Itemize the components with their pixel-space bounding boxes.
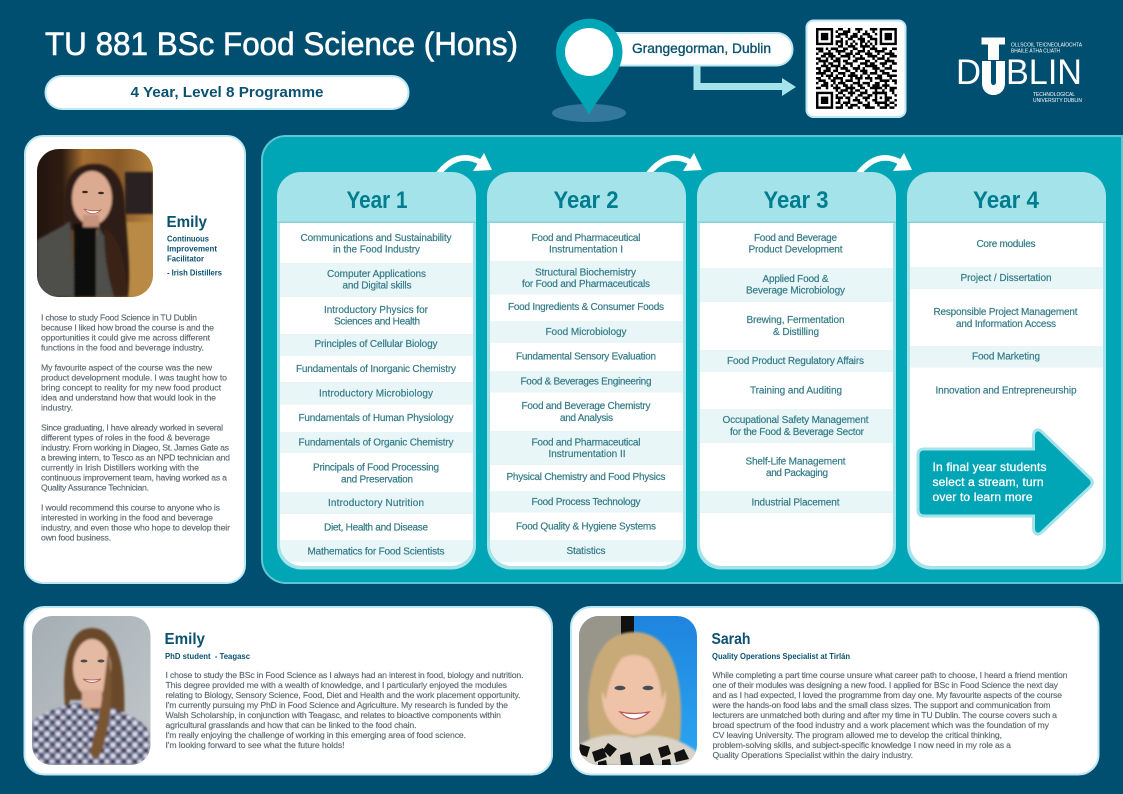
Year 2 modules: Fundamental Sensory Evaluation [516, 352, 656, 362]
Year 1 modules: and Digital skills [342, 280, 412, 292]
photo: Emily [32, 616, 150, 765]
Year 3 modules: Product Development [748, 244, 843, 256]
Year 1 modules: Fundamentals of Organic Chemistry [298, 438, 454, 448]
Year 3 modules: Applied Food & [762, 274, 829, 285]
testimonial text: industry. [41, 403, 73, 413]
testimonial text: currently in Irish Distillers working with the [41, 463, 199, 473]
testimonial text: functions in the food and beverage industry. [41, 343, 204, 353]
TU Dublin logo: BLIN [1006, 53, 1082, 92]
role: Continuous Improvement Facilitator, Irish Distillers: Improvement [167, 244, 217, 254]
testimonial text: a brewing intern, to Tesco as an NPD technician and [41, 453, 230, 463]
role: Continuous Improvement Facilitator, Irish Distillers: Continuous [167, 234, 210, 244]
testimonial text: interested in working in the food and beverage [41, 513, 213, 523]
Year 2 modules: Physical Chemistry and Food Physics [506, 472, 666, 483]
testimonial text: Walsh Scholarship, in conjunction with Teagasc, and relates to bioactive components within [166, 710, 501, 720]
testimonial text: problem-solving skills, and subject-specific knowledge I now need in my role as a [712, 740, 1011, 750]
Year 1 modules: Fundamentals of Human Physiology [298, 413, 454, 424]
Year 2 modules: Food Quality & Hygiene Systems [516, 522, 656, 532]
testimonial text: lecturers are unmatched both during and after my time in TU Dublin. The course covers such a [712, 710, 1057, 720]
Year 1 modules: Introductory Physics for [324, 305, 429, 316]
photo: Emily [37, 149, 153, 297]
testimonial text: My favourite aspect of the course was the new [41, 363, 213, 373]
panel: graduate testimonial Sarah, Tirlán [571, 607, 1098, 774]
Year 2 modules: and Analysis [560, 413, 613, 424]
callout arrow: final year stream: over to learn more [932, 490, 1033, 504]
TU Dublin logo: UNIVERSITY DUBLIN [1033, 98, 1082, 104]
Year 4 modules: Responsible Project Management [934, 307, 1078, 318]
testimonial text: different types of roles in the food & beverage [41, 433, 210, 443]
testimonial text: Since graduating, I have already worked in several [41, 423, 223, 433]
QR code [806, 20, 906, 117]
Year 1 modules: in the Food Industry [333, 244, 420, 256]
heading: Year 3: Year 3 [764, 187, 828, 214]
testimonial text: relating to Biology, Sensory Science, Food, Diet and Health and the work placement opportunity. [166, 690, 520, 700]
testimonial text: because I liked how broad the course is and the [41, 323, 214, 333]
Year 4 modules: Innovation and Entrepreneurship [936, 386, 1077, 396]
testimonial text: opportunities it could give me across different [41, 333, 211, 343]
programme level pill [46, 76, 408, 109]
TU Dublin logo: BHAILE ÁTHA CLIATH [1011, 48, 1060, 54]
Year 3 modules: & Distilling [773, 327, 819, 338]
testimonial text: bring concept to reality for my new food product [41, 383, 222, 393]
Year 1 modules: Computer Applications [327, 269, 426, 280]
role: Continuous Improvement Facilitator, Irish Distillers: - Irish Distillers [167, 268, 223, 278]
Year 1 modules: Principles of Cellular Biology [314, 339, 438, 350]
testimonial text: broad spectrum of the food industry and a work placement which was the foundation of my [712, 720, 1050, 730]
arrow: Year 1 to Year 2 [436, 153, 492, 177]
panel: Year 1 [277, 172, 476, 570]
Year 1 modules: Sciences and Health [334, 316, 420, 328]
Year 3 modules: Food and Beverage [754, 233, 837, 244]
Year 2 modules: Structural Biochemistry [535, 268, 636, 278]
role: PhD student, Teagasc: PhD student - Teagasc [165, 652, 251, 661]
Year 2 modules: Food Ingredients & Consumer Foods [508, 302, 664, 313]
Year 4 modules [934, 239, 1078, 396]
Year 4 modules: Food Marketing [972, 352, 1040, 362]
role: Continuous Improvement Facilitator, Irish Distillers [167, 234, 223, 278]
Year 3 modules [722, 233, 869, 509]
panel: Year 3 [697, 172, 896, 570]
testimonial text: industry, and even those who hope to develop their [41, 523, 230, 533]
panel: Year 4 [907, 172, 1106, 570]
panel: Year 2 [487, 172, 686, 570]
Year 1 modules: Fundamentals of Inorganic Chemistry [296, 364, 456, 375]
Year 1 modules: Mathematics for Food Scientists [308, 546, 444, 558]
name: Emily: Emily [164, 631, 205, 648]
Year 1 modules: Diet, Health and Disease [324, 522, 428, 534]
heading: Year 1: Year 1 [346, 187, 408, 214]
Year 2 modules: for Food and Pharmaceuticals [522, 279, 650, 290]
Year 1 modules [296, 233, 456, 558]
testimonial text: idea and understand how that would look in the [41, 393, 216, 403]
Year 2 modules: Food & Beverages Engineering [520, 376, 652, 388]
testimonial text: product development module. I was taught how to [41, 373, 227, 383]
Year 2 modules: Instrumentation II [548, 449, 626, 460]
Year 4 modules: Core modules [976, 239, 1036, 250]
Year 3 modules: Food Product Regulatory Affairs [727, 356, 864, 367]
location label pill [600, 33, 792, 66]
icon: location pin [552, 19, 626, 122]
Year 2 modules: Food and Pharmaceutical [532, 438, 640, 448]
testimonial text: Quality Assurance Technician. [41, 483, 149, 493]
testimonial text: I'm really enjoying the challenge of working in this emerging area of food science. [166, 730, 466, 740]
Year 2 modules [506, 233, 666, 557]
title: TU 881 BSc Food Science (Hons) [45, 26, 518, 62]
Year 2 modules: Food and Beverage Chemistry [522, 401, 650, 412]
Year 3 modules: for the Food & Beverage Sector [730, 427, 865, 438]
Year 1 modules: Communications and Sustainability [300, 233, 452, 244]
Year 3 modules: Brewing, Fermentation [746, 315, 844, 326]
Year 1 modules: Introductory Nutrition [328, 498, 424, 509]
testimonial text: were the hands-on food labs and the small class sizes. The support and communication from [712, 700, 1050, 710]
testimonial text: CV leaving University. The program allowed me to develop the critical thinking, [712, 730, 1002, 740]
testimonial text: I chose to study Food Science in TU Dublin [41, 313, 197, 323]
testimonial text: industry. From working in Diageo, St. James Gate as [41, 443, 230, 453]
testimonial text: Quality Operations Specialist within the dairy industry. [712, 750, 913, 760]
Year 1 modules: Principals of Food Processing [313, 462, 439, 474]
testimonial text [712, 670, 1068, 760]
photo: Sarah [579, 616, 697, 765]
Year 3 modules: and Packaging [766, 468, 828, 479]
testimonial text: one of their modules was designing a new food. I applied for BSc in Food Science the next day [712, 680, 1059, 690]
testimonial text: While completing a part time course unsure what career path to choose, I heard a friend mention [712, 670, 1068, 680]
role: Quality Operations Specialist at Tirlán: Quality Operations Specialist at Tirlán [712, 652, 850, 661]
Year 2 modules: Food and Pharmaceutical [532, 233, 640, 244]
arrow: Year 2 to Year 3 [646, 153, 702, 177]
Year 2 modules: Food Microbiology [546, 327, 626, 338]
Year 1 modules: Introductory Microbiology [319, 388, 433, 400]
testimonial text [166, 670, 524, 750]
Year 3 modules: Industrial Placement [752, 498, 840, 508]
heading: Year 2: Year 2 [554, 187, 618, 214]
testimonial text: I chose to study the BSc in Food Science as I always had an interest in food, biology and nutrition. [166, 670, 524, 680]
TU Dublin logo: OLLSCOIL TEICNEOLAÍOCHTA [1011, 42, 1082, 48]
TU Dublin logo [956, 38, 1082, 104]
callout arrow: final year stream [918, 430, 1092, 534]
Year 2 modules: Statistics [566, 546, 606, 557]
testimonial text: and as I had expected, I loved the programme from day one. My favourite aspects of the course [712, 690, 1062, 700]
Year 4 modules: Project / Dissertation [960, 273, 1052, 284]
Year 3 modules: Beverage Microbiology [746, 286, 845, 296]
testimonial text: I would recommend this course to anyone who is [41, 503, 221, 513]
panel: course years background [262, 136, 1122, 583]
testimonial text: continuous improvement team, having worked as a [41, 473, 227, 483]
callout arrow: final year stream: select a stream, turn [932, 475, 1044, 489]
programme level pill: 4 Year, Level 8 Programme [130, 84, 324, 101]
testimonial text: own food business. [41, 533, 111, 543]
TU Dublin logo: D [956, 53, 981, 92]
name: Emily: Emily [166, 214, 207, 231]
testimonial text: This degree provided me with a wealth of knowledge, and I particularly enjoyed the modules [166, 680, 508, 690]
Year 3 modules: Occupational Safety Management [722, 415, 869, 426]
testimonial text: agricultural grasslands and how that can be linked to the food chain. [166, 720, 416, 730]
Year 2 modules: Instrumentation I [549, 244, 623, 256]
Year 3 modules: Shelf-Life Management [746, 456, 846, 468]
heading: Year 4: Year 4 [973, 187, 1039, 214]
testimonial text: I'm currently pursuing my PhD in Food Science and Agriculture. My research is funded by the [166, 700, 508, 710]
callout arrow: final year stream: In final year students [932, 460, 1046, 474]
TU Dublin logo: TECHNOLOGICAL [1033, 92, 1075, 98]
Year 1 modules: and Preservation [341, 474, 413, 486]
Year 3 modules: Training and Auditing [750, 386, 842, 396]
testimonial text [41, 313, 230, 543]
name: Sarah: Sarah [712, 631, 750, 648]
panel: graduate testimonial Emily, Irish Distillers [25, 136, 245, 583]
location label pill: Grangegorman, Dublin [632, 40, 771, 56]
testimonial text: I'm looking forward to see what the future holds! [166, 740, 344, 750]
Year 4 modules: and Information Access [956, 319, 1056, 330]
Year 2 modules: Food Process Technology [532, 497, 640, 508]
panel: graduate testimonial Emily, Teagasc [24, 607, 552, 774]
arrow: location to QR code [694, 66, 796, 96]
arrow: Year 3 to Year 4 [856, 153, 912, 177]
role: Continuous Improvement Facilitator, Irish Distillers: Facilitator [167, 254, 204, 264]
